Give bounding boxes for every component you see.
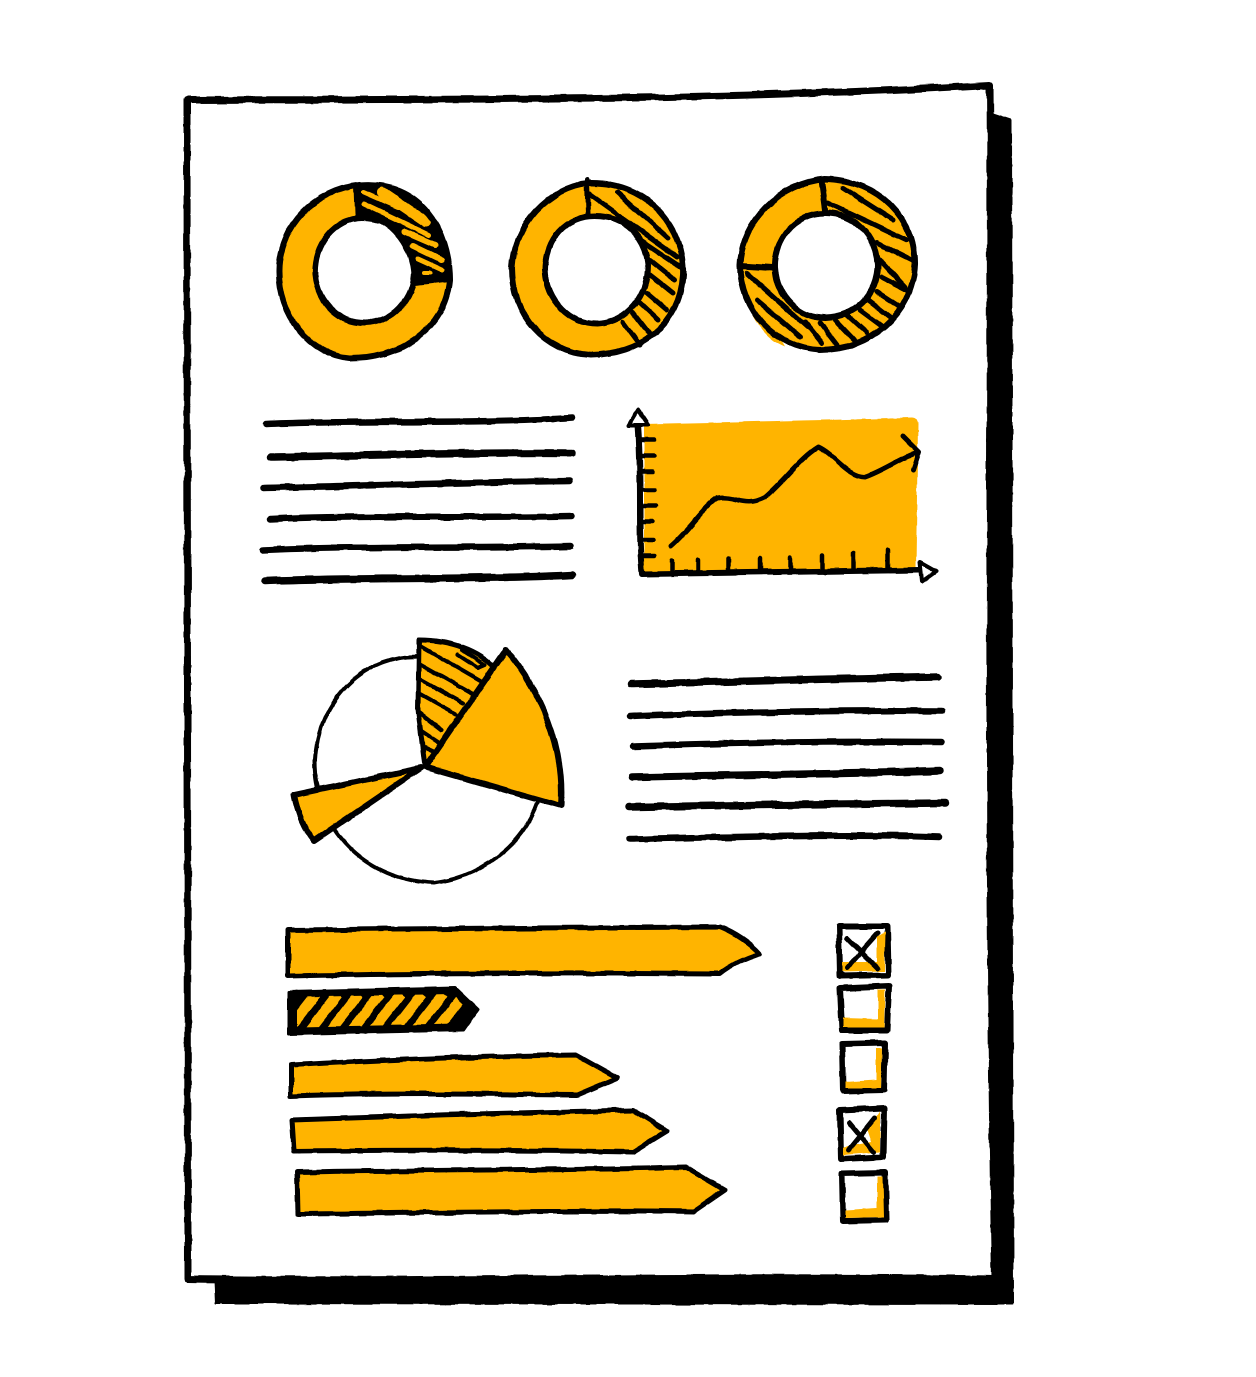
document page [187, 85, 995, 1280]
axes [638, 424, 920, 574]
hatched segment [740, 180, 917, 345]
bar 2 hatched [288, 988, 478, 1034]
text lines left [263, 418, 573, 581]
bar 5 [297, 1167, 725, 1214]
hatched segment [587, 180, 682, 345]
checkboxes [839, 926, 889, 1221]
checkbox 4 checked [840, 1108, 884, 1159]
bar 1 [288, 927, 760, 976]
page shadow [215, 113, 1013, 1304]
axis arrowheads [629, 410, 936, 581]
donut chart 2 [512, 180, 683, 355]
pie circle [315, 657, 540, 883]
trend line [671, 436, 919, 546]
large slice [425, 650, 561, 806]
checkbox 5 [842, 1173, 886, 1221]
donut chart 1 [279, 185, 450, 358]
bar 3 [291, 1055, 617, 1096]
hatched slice [418, 640, 495, 767]
donut chart 3 [740, 179, 917, 350]
axis ticks [640, 440, 888, 572]
fill spill [746, 298, 872, 347]
bar 4 [292, 1110, 667, 1152]
infographic sketch illustration [182, 82, 1014, 1306]
small slice [294, 768, 421, 841]
text lines right [629, 677, 945, 839]
pie chart [294, 640, 561, 883]
line chart [629, 410, 936, 581]
dark hatched segment [356, 186, 450, 283]
arrow bars [288, 927, 760, 1214]
chart area [644, 418, 918, 574]
checkbox 2 [840, 986, 889, 1030]
checkbox 3 [842, 1043, 885, 1091]
checkbox 1 checked [839, 926, 888, 976]
